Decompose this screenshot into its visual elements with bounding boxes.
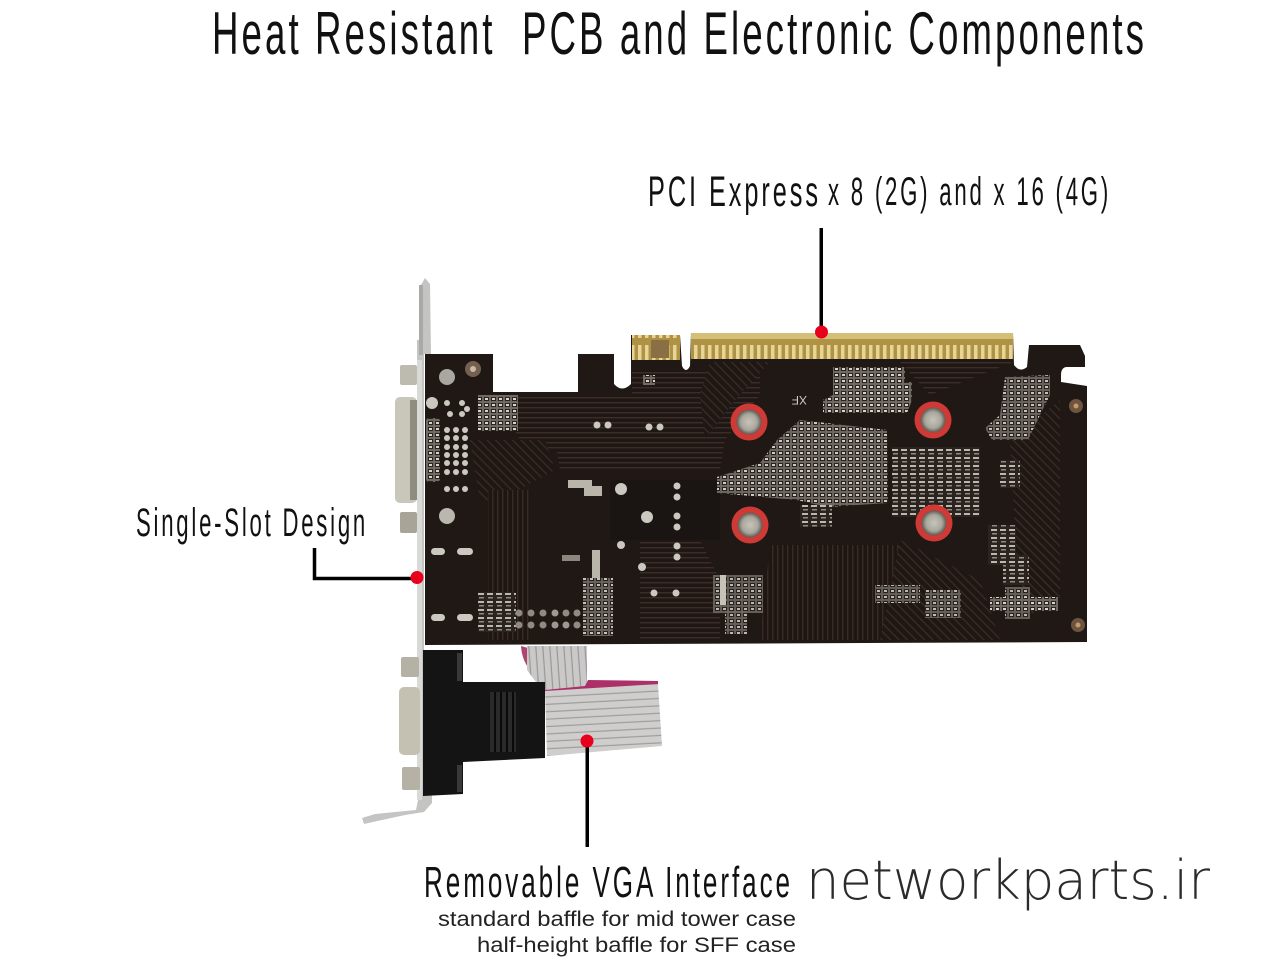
PCI Express label: PCI Express — [648, 168, 821, 216]
heatsink screw bottom-left — [732, 506, 768, 544]
heatsink screw top-right — [914, 402, 952, 438]
ribbon cable lower — [545, 680, 662, 756]
graphics card photo — [362, 278, 1087, 824]
copper traces — [470, 362, 1060, 640]
callout: PCI Express — [648, 168, 1111, 338]
VGA leader line — [586, 741, 589, 847]
heatsink screw top-left — [730, 404, 768, 440]
heatsink screw bottom-right — [916, 504, 952, 542]
single-slot red dot — [410, 571, 424, 584]
PCB board — [425, 333, 1087, 645]
DVI connector — [395, 365, 417, 533]
PCI red dot — [815, 326, 828, 338]
silk marking XF: XF — [792, 393, 807, 407]
callout: removable VGA interface — [424, 734, 796, 957]
VGA red dot — [580, 734, 594, 748]
through-hole vias — [426, 361, 1085, 632]
VGA description line 2: half-height baffle for SFF case — [477, 933, 796, 957]
VGA connector — [399, 657, 420, 790]
metal bracket — [362, 278, 432, 824]
PCI leader line — [820, 228, 823, 332]
VGA label: Removable VGA Interface — [424, 858, 793, 907]
ribbon cable upper — [521, 646, 587, 690]
single-slot label: Single-Slot Design — [136, 501, 368, 545]
callout: single-slot design — [136, 501, 424, 584]
watermark: networkparts.ir — [806, 849, 1211, 912]
VGA description line 1: standard baffle for mid tower case — [438, 907, 796, 931]
VGA black bracket — [423, 650, 545, 796]
single-slot leader line — [314, 548, 417, 578]
gold fingers — [632, 333, 1013, 360]
silkscreen component clusters — [478, 367, 1058, 636]
